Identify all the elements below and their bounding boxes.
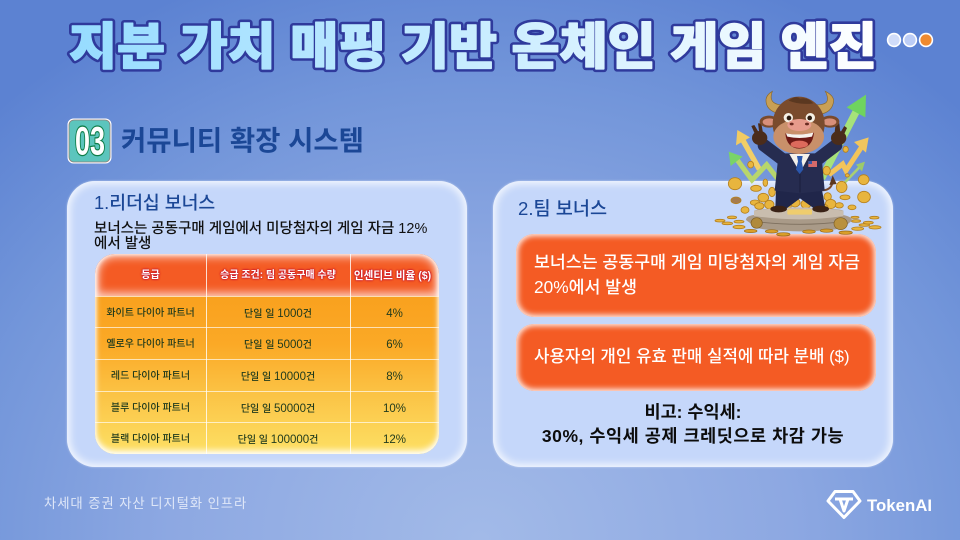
title: 지분 가치 매핑 기반 온체인 게임 엔진 <box>69 19 877 75</box>
table: partner tiers: 옐로우 다이아 파트너 <box>106 339 195 350</box>
table: partner tiers: 6% <box>386 339 403 351</box>
decorative three-dot menu icon <box>886 32 934 48</box>
arrow: small green <box>843 162 865 184</box>
section number badge 03: 03 <box>75 120 105 164</box>
leadership bonus description <box>94 220 427 252</box>
table: partner tiers: 단일 일 50000건 <box>241 403 315 415</box>
bull head <box>773 97 825 154</box>
table: partner tiers: 화이트 다이아 파트너 <box>106 308 195 319</box>
panel: leadership bonus <box>67 181 467 467</box>
leadership bonus description: 에서 발생 <box>94 236 151 252</box>
bull horns <box>766 91 834 115</box>
icon: diamond <box>828 492 860 518</box>
table: partner tiers: 단일 일 1000건 <box>244 308 312 320</box>
title: 지분 가치 매핑 기반 온체인 게임 엔진 <box>69 19 877 75</box>
table: partner tiers: 단일 일 5000건 <box>244 339 312 351</box>
bull tail tuft <box>829 175 837 185</box>
arrow: big green <box>822 95 866 178</box>
bull hands <box>751 123 847 145</box>
table: partner tiers: 단일 일 100000건 <box>238 434 318 446</box>
arrow: yellow left <box>736 130 759 169</box>
table: partner tiers: 승급 조건: 팀 공동구매 수량 <box>220 270 336 281</box>
bull ears <box>760 116 839 128</box>
callout: distribution <box>516 324 876 391</box>
logo wordmark: TokenAI <box>867 496 932 515</box>
callout text: bonus source: 20%에서 발생 <box>534 277 637 297</box>
table: partner tiers: 10% <box>383 403 406 415</box>
coins: flying and piled <box>715 146 881 230</box>
pedestal <box>746 207 852 231</box>
table: partner tiers: 단일 일 10000건 <box>241 371 315 383</box>
coins: ground front <box>744 229 852 236</box>
note: income tax: 30%, 수익세 공제 크레딧으로 차감 가능 <box>542 426 844 446</box>
table: partner tiers: 레드 다이아 파트너 <box>111 371 190 382</box>
bull jacket <box>775 153 825 193</box>
panel: team bonus <box>493 181 893 467</box>
table: partner tiers: 블루 다이아 파트너 <box>111 403 190 414</box>
footer text: 차세대 증권 자산 디지털화 인프라 <box>44 496 247 511</box>
callout text: bonus source <box>534 252 860 297</box>
table: partner tiers: 12% <box>383 434 406 446</box>
leadership bonus description: 보너스는 공동구매 게임에서 미당첨자의 게임 자금 12% <box>94 221 427 237</box>
table: partner tiers: 등급 <box>141 270 160 281</box>
section number badge 03 <box>68 118 112 164</box>
note: income tax: 비고: 수익세: <box>644 402 742 422</box>
panel heading: leadership bonus: 1.리더십 보너스 <box>94 192 215 213</box>
table: partner tiers <box>95 254 439 454</box>
bull arms <box>759 139 841 160</box>
table: partner tiers: 인센티브 비율 ($) <box>354 270 431 282</box>
table: partner tiers: 블랙 다이아 파트너 <box>111 434 190 445</box>
table: partner tiers: 8% <box>386 371 403 383</box>
bull tail <box>818 183 832 190</box>
section heading: 커뮤니티 확장 시스템 <box>121 125 364 156</box>
table: partner tiers: 4% <box>386 308 403 320</box>
callout text: distribution: 사용자의 개인 유효 판매 실적에 따라 분배 ($) <box>534 347 850 366</box>
callout: bonus source <box>516 234 876 317</box>
arrow: yellow zigzag right <box>824 137 869 173</box>
arrow: green zigzag <box>729 152 779 180</box>
shirt and tie <box>789 154 817 193</box>
panel heading: team bonus: 2.팀 보너스 <box>518 198 607 219</box>
bull legs and shoes <box>770 190 829 212</box>
callout text: bonus source: 보너스는 공동구매 게임 미당첨자의 게임 자금 <box>534 252 860 272</box>
note: income tax <box>542 402 844 446</box>
